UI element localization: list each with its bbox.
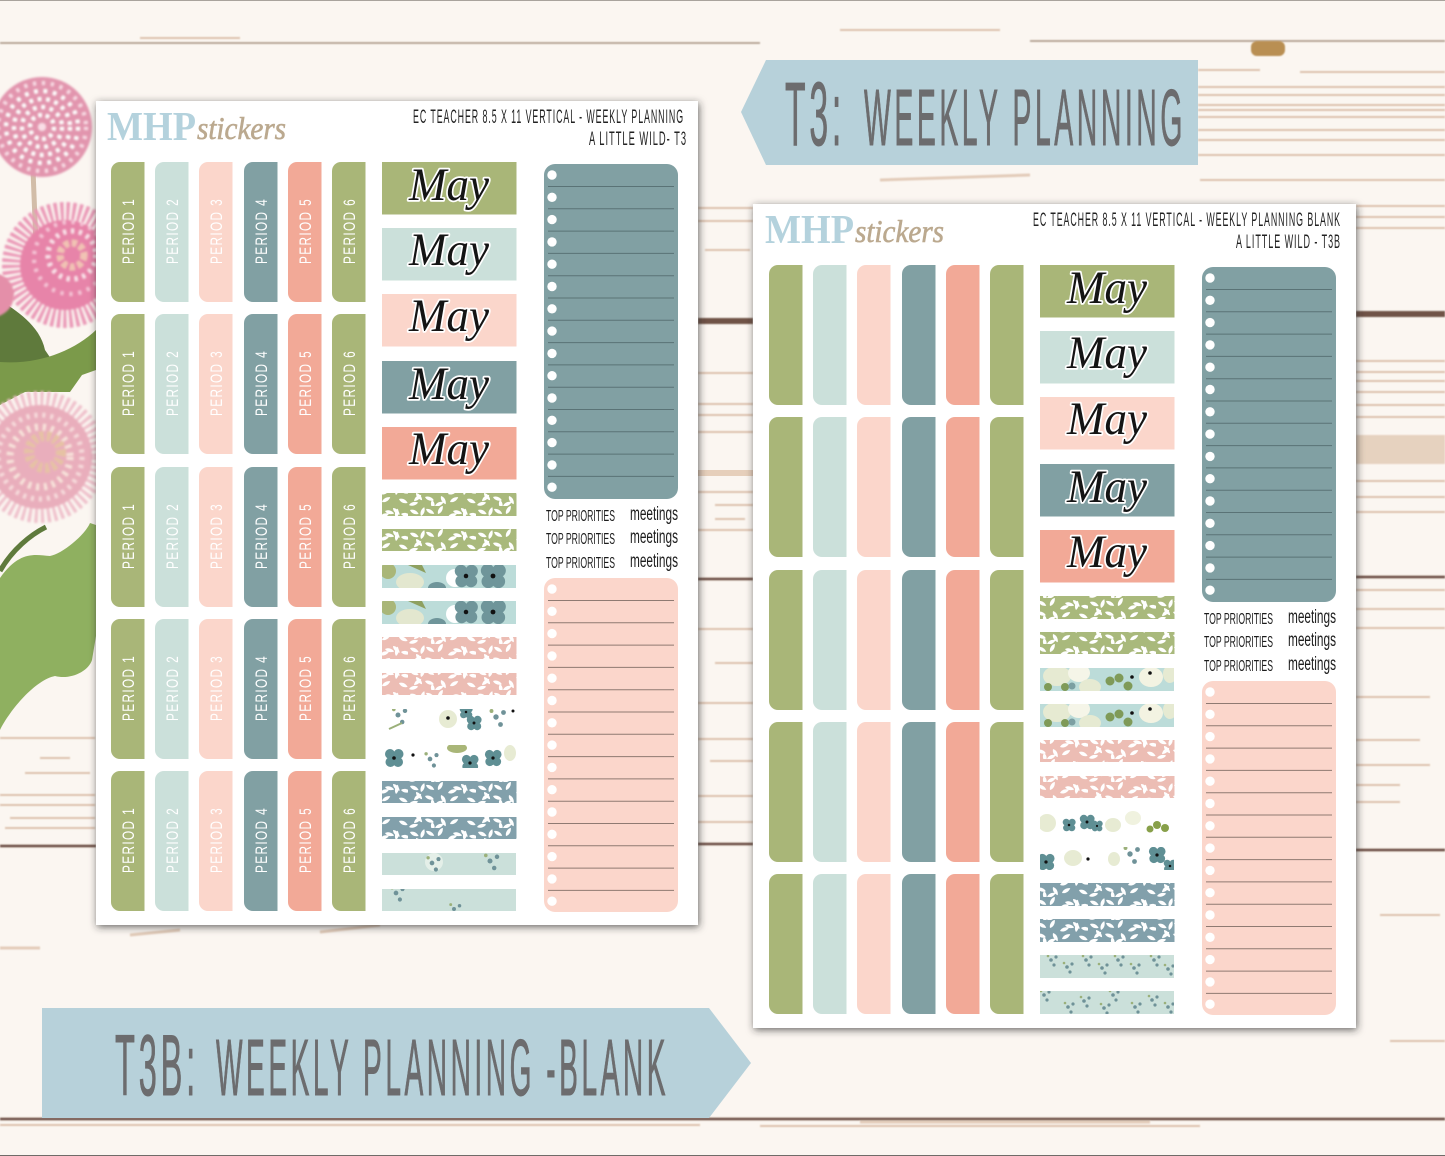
blank tabs: second green column xyxy=(990,265,1024,1014)
washi strips: slate leaves xyxy=(1040,883,1174,942)
leaf: large light green leaf xyxy=(0,523,96,730)
floral decoration: pink flowers and leaves xyxy=(0,77,115,730)
washi strips: green leaves xyxy=(1040,596,1174,654)
period labels 3 xyxy=(207,198,226,873)
period labels 3: PERIOD 3 xyxy=(207,503,226,569)
labels: top priorities and meetings: meetings xyxy=(1288,630,1336,651)
washi strips: pink leaves xyxy=(1040,740,1174,798)
sheet title xyxy=(413,107,687,150)
logo: MHP stickers: stickers xyxy=(855,213,944,249)
stem xyxy=(0,527,46,571)
labels: top priorities and meetings xyxy=(1204,607,1336,675)
labels: top priorities and meetings: meetings xyxy=(630,527,678,548)
period labels 3: PERIOD 3 xyxy=(207,655,226,721)
period labels 2: PERIOD 2 xyxy=(163,350,182,416)
period labels 4: PERIOD 4 xyxy=(252,350,271,416)
period tabs: mint column xyxy=(155,162,188,911)
period labels 1 xyxy=(119,198,138,873)
washi strips: slate leaves xyxy=(382,781,516,839)
period labels 3: PERIOD 3 xyxy=(207,198,226,264)
labels: top priorities and meetings: TOP PRIORITIES xyxy=(1204,611,1273,628)
labels: top priorities and meetings: TOP PRIORITIES xyxy=(546,531,615,548)
leaf: dark green back leaves xyxy=(0,300,60,380)
labels: top priorities and meetings: TOP PRIORITIES xyxy=(1204,634,1273,651)
period labels 6: PERIOD 6 xyxy=(340,655,359,721)
sticker sheet: T3 weekly planning: A LITTLE WILD- T3 xyxy=(589,129,687,150)
period labels 4: PERIOD 4 xyxy=(252,807,271,873)
blank tabs: mint column xyxy=(813,265,846,1014)
washi strips: pink leaves xyxy=(382,637,516,695)
period tabs: green column xyxy=(111,162,144,911)
washi strips: white with teal flowers xyxy=(1038,811,1177,872)
month banners: May xyxy=(1066,393,1147,445)
washi strips: white with teal flowers xyxy=(385,709,516,768)
labels: top priorities and meetings: meetings xyxy=(1288,654,1336,675)
period labels 4: PERIOD 4 xyxy=(252,503,271,569)
period labels 5: PERIOD 5 xyxy=(296,503,315,569)
period labels 2: PERIOD 2 xyxy=(163,655,182,721)
month banners: May xyxy=(1066,262,1147,314)
leaf: middle green leaf xyxy=(0,330,96,405)
period labels 4: PERIOD 4 xyxy=(252,198,271,264)
period labels 1: PERIOD 1 xyxy=(119,807,138,873)
month banners: May xyxy=(1066,526,1147,578)
banner: T3 weekly planning: T3: xyxy=(785,65,845,165)
checklist panel: teal xyxy=(544,164,678,499)
period tabs: second green column xyxy=(332,162,366,911)
period labels 5: PERIOD 5 xyxy=(296,350,315,416)
month banners: May xyxy=(408,423,489,475)
month banners: May xyxy=(1066,327,1147,379)
logo: MHP stickers: MHP xyxy=(765,206,854,252)
flower: lower pale pink flower xyxy=(0,401,96,513)
banner: T3 weekly planning xyxy=(741,60,1198,165)
month banners: May xyxy=(408,159,489,211)
month banners: May xyxy=(408,290,489,342)
banner: T3B weekly planning blank xyxy=(42,1008,751,1118)
sheet title xyxy=(1033,210,1341,253)
banner: T3B weekly planning blank: T3B: xyxy=(115,1018,199,1114)
period labels 4: PERIOD 4 xyxy=(252,655,271,721)
washi strips: mint with large teal flowers xyxy=(382,565,516,624)
blank tabs: green column xyxy=(769,265,802,1014)
checklist panel: peach xyxy=(544,578,678,912)
month banners: May xyxy=(408,358,489,410)
labels: top priorities and meetings: TOP PRIORITIES xyxy=(546,555,615,572)
sticker sheet: T3B weekly planning blank xyxy=(753,204,1356,1028)
labels: top priorities and meetings: TOP PRIORITIES xyxy=(546,508,615,525)
period labels 2 xyxy=(163,198,182,873)
period labels 6: PERIOD 6 xyxy=(340,198,359,264)
blank tabs: salmon column xyxy=(946,265,980,1014)
period labels 4 xyxy=(252,198,271,873)
period labels 2: PERIOD 2 xyxy=(163,807,182,873)
period tabs: teal column xyxy=(244,162,278,911)
period labels 2: PERIOD 2 xyxy=(163,198,182,264)
period labels 6: PERIOD 6 xyxy=(340,350,359,416)
period labels 5 xyxy=(296,198,315,873)
logo: MHP stickers xyxy=(765,206,944,252)
period labels 5: PERIOD 5 xyxy=(296,198,315,264)
month banners xyxy=(382,159,516,480)
labels: top priorities and meetings: TOP PRIORITIES xyxy=(1204,658,1273,675)
blank tabs: teal column xyxy=(902,265,936,1014)
month banners: May xyxy=(1066,461,1147,513)
washi strips: mint with tiny sprigs xyxy=(1040,955,1175,1015)
period tabs: peach column xyxy=(199,162,232,911)
logo: MHP stickers: MHP xyxy=(107,103,196,149)
period labels 6 xyxy=(340,198,359,873)
period labels 1: PERIOD 1 xyxy=(119,350,138,416)
flower: top pink pompom xyxy=(0,77,92,177)
period labels 3: PERIOD 3 xyxy=(207,350,226,416)
period labels 2: PERIOD 2 xyxy=(163,503,182,569)
logo: MHP stickers: stickers xyxy=(197,110,286,146)
labels: top priorities and meetings: meetings xyxy=(1288,607,1336,628)
text: EC TEACHER 8.5 X 11 VERTICAL - WEEKLY PLANNING xyxy=(413,107,684,128)
flower: middle spiky pink flower xyxy=(15,215,115,315)
period labels 5: PERIOD 5 xyxy=(296,807,315,873)
labels: top priorities and meetings: meetings xyxy=(630,551,678,572)
sticker sheet: T3 weekly planning xyxy=(96,101,698,925)
checklist panel: teal xyxy=(1202,267,1336,602)
period labels 5: PERIOD 5 xyxy=(296,655,315,721)
checklist panel: peach xyxy=(1202,681,1336,1015)
month banners: May xyxy=(408,224,489,276)
labels: top priorities and meetings xyxy=(546,504,678,572)
washi strips: mint with sparse flowers xyxy=(382,853,516,916)
period labels 1: PERIOD 1 xyxy=(119,503,138,569)
washi strips: green leaves xyxy=(382,493,516,551)
period labels 1: PERIOD 1 xyxy=(119,655,138,721)
period labels 6: PERIOD 6 xyxy=(340,503,359,569)
labels: top priorities and meetings: meetings xyxy=(630,504,678,525)
period tabs: salmon column xyxy=(288,162,322,911)
logo: MHP stickers xyxy=(107,103,286,149)
period labels 1: PERIOD 1 xyxy=(119,198,138,264)
period labels 3: PERIOD 3 xyxy=(207,807,226,873)
blank tabs: peach column xyxy=(857,265,890,1014)
washi strips: mint with cream flowers xyxy=(1040,668,1174,727)
month banners xyxy=(1040,262,1174,582)
flower: partial flower at left edge xyxy=(0,273,14,317)
period labels 6: PERIOD 6 xyxy=(340,807,359,873)
